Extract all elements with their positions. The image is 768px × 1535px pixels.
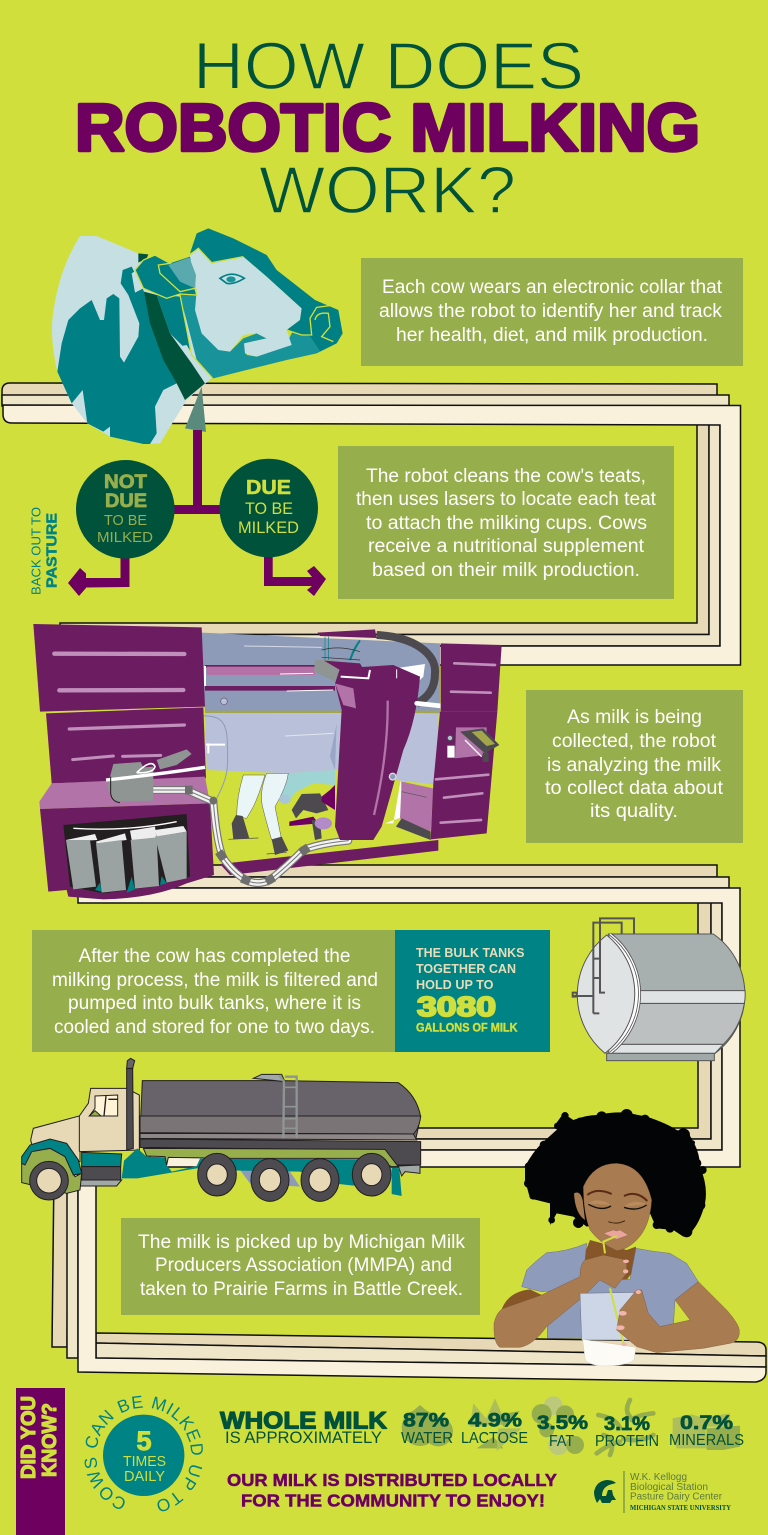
text box: milk quality analysis: collected, the robot [552, 731, 717, 752]
text box: electronic collar [361, 258, 743, 366]
panel: did you know: KNOW? [39, 1403, 61, 1477]
stats: milk composition: 3.5% [537, 1412, 588, 1434]
text box: filtering and cooling: After the cow has completed the [78, 946, 350, 967]
neck [583, 1240, 637, 1280]
icon: mineral cubes [673, 1413, 740, 1450]
cow legs and udder [228, 770, 335, 855]
text box: filtering and cooling: pumped into bulk tanks, where it is [68, 993, 361, 1014]
hose and robot arm [314, 629, 442, 840]
arrow: back out to pasture [68, 558, 130, 596]
text box: cleaning and attaching cups: based on their milk production. [372, 560, 640, 581]
title: WORK? [259, 153, 516, 228]
callout: tank capacity 3080 gallons [395, 930, 550, 1052]
node: due to be milked: DUE [246, 477, 291, 499]
text box: pickup by MMPA: taken to Prairie Farms in Battle Creek. [140, 1279, 463, 1300]
text box: cleaning and attaching cups: to attach the milking cups. Cows [366, 513, 647, 534]
text box: milk quality analysis: As milk is being [567, 707, 702, 728]
face [574, 1163, 652, 1251]
stats: milk composition: WATER [401, 1430, 453, 1447]
shirt [522, 1243, 698, 1338]
text box: electronic collar: allows the robot to identify her and track [379, 301, 723, 322]
node: due to be milked: MILKED [238, 518, 299, 537]
illustration: dairy cow with collar [52, 228, 343, 444]
stats: milk composition: MINERALS [669, 1432, 744, 1449]
panel: did you know: DID YOU [18, 1396, 40, 1479]
callout: tank capacity 3080 gallons: GALLONS OF MILK [416, 1022, 518, 1034]
text box: filtering and cooling: milking process, the milk is filtered and [52, 970, 378, 991]
message: distributed locally [227, 1470, 557, 1510]
robot floor rail [220, 840, 438, 875]
message: distributed locally: OUR MILK IS DISTRIBUTED LOCALLY [227, 1470, 557, 1490]
stats: milk composition: 87% [403, 1410, 449, 1432]
text box: filtering and cooling [32, 930, 395, 1052]
label: back out to pasture: PASTURE [44, 513, 60, 588]
illustration: girl drinking milk [494, 1109, 739, 1366]
credit: W.K. Kellogg Biological Station: Pasture Dairy Center [630, 1492, 723, 1502]
text box: cleaning and attaching cups: receive a nutritional supplement [368, 536, 645, 557]
text box: pickup by MMPA: The milk is picked up by Michigan Milk [138, 1232, 465, 1253]
text box: cleaning and attaching cups [338, 446, 674, 599]
conveyor track: winding milk path [2, 383, 766, 1382]
text box: milk quality analysis [526, 690, 743, 843]
callout: tank capacity 3080 gallons: 3080 [417, 991, 496, 1022]
icon: lactose triangles [470, 1398, 522, 1451]
collar tag [185, 387, 206, 432]
flow connector: purple gate [172, 430, 222, 514]
milk tubing [153, 790, 348, 883]
arrow: to milking [264, 557, 326, 596]
text box: pickup by MMPA: Producers Association (MMPA) and [155, 1255, 452, 1276]
stats: milk composition: 0.7% [680, 1412, 733, 1434]
icon: cow eye [220, 274, 244, 284]
badge: cows milked up to 5 times daily: DAILY [124, 1468, 165, 1485]
credit: W.K. Kellogg Biological Station [624, 1471, 731, 1513]
tank ladder pipes [573, 918, 634, 1013]
stats: milk composition: 3.1% [604, 1413, 650, 1435]
stats: milk composition: LACTOSE [461, 1430, 528, 1447]
hair [524, 1109, 707, 1237]
label: back out to pasture: BACK OUT TO [28, 507, 44, 595]
icon: protein chains [597, 1400, 653, 1455]
text box: milk quality analysis: its quality. [590, 801, 678, 822]
node: due to be milked [219, 459, 318, 557]
credit: W.K. Kellogg Biological Station: MICHIGAN STATE UNIVERSITY [630, 1504, 731, 1512]
illustration: bulk storage tank [573, 918, 745, 1061]
node: not due to be milked: DUE [105, 491, 147, 512]
label: back out to pasture [28, 507, 60, 595]
heading: whole milk is approximately [220, 1408, 388, 1447]
stats: milk composition: PROTEIN [595, 1433, 659, 1450]
credit: W.K. Kellogg Biological Station: W.K. Kellogg [630, 1472, 687, 1483]
text box: cleaning and attaching cups: then uses lasers to locate each teat [356, 489, 657, 510]
text box: milk quality analysis: to collect data about [545, 778, 724, 799]
callout: tank capacity 3080 gallons: HOLD UP TO [416, 977, 494, 992]
message: distributed locally: FOR THE COMMUNITY TO ENJOY! [241, 1490, 545, 1510]
resting arm [617, 1282, 739, 1353]
shadow sleeve [502, 1289, 542, 1309]
heading: whole milk is approximately: WHOLE MILK [220, 1408, 388, 1434]
left cabinet [33, 624, 214, 899]
icon: water droplets [402, 1405, 453, 1446]
badge: cows milked up to 5 times daily: COWS CAN BE MILKED UP TO [84, 1396, 203, 1512]
drinking arm [494, 1255, 627, 1347]
heading: whole milk is approximately: IS APPROXIMATELY [225, 1428, 382, 1447]
credit: W.K. Kellogg Biological Station: Biological Station [630, 1482, 708, 1493]
icon: fat globules [532, 1396, 584, 1455]
title [75, 29, 700, 228]
stats: milk composition [401, 1410, 744, 1450]
glass of milk [580, 1292, 638, 1366]
title: HOW DOES [193, 29, 584, 104]
node: not due to be milked [76, 460, 175, 559]
truck wheels [30, 1153, 391, 1201]
panel: did you know [16, 1388, 65, 1535]
illustration: milk tanker truck [22, 1058, 421, 1201]
text box: pickup by MMPA [121, 1218, 480, 1315]
drinking straw [603, 1236, 623, 1343]
stats: milk composition: FAT [549, 1433, 574, 1450]
fingernails [616, 1260, 641, 1346]
stats: milk composition: 4.9% [468, 1410, 522, 1432]
milk bins [63, 814, 190, 893]
node: due to be milked: TO BE [245, 499, 293, 518]
tanker ladder [279, 1075, 297, 1138]
badge: cows milked up to 5 times daily: 5 [136, 1426, 152, 1456]
vacuum unit [106, 749, 205, 803]
right cabinet [396, 643, 502, 840]
callout: tank capacity 3080 gallons: TOGETHER CAN [416, 961, 516, 976]
node: not due to be milked: NOT [104, 472, 147, 493]
node: not due to be milked: TO BE [104, 512, 147, 529]
text box: electronic collar: her health, diet, and milk production. [396, 325, 708, 346]
text box: cleaning and attaching cups: The robot cleans the cow's teats, [366, 466, 646, 487]
badge: cows milked up to 5 times daily: TIMES [123, 1453, 166, 1470]
illustration: milking robot [33, 624, 502, 899]
text box: milk quality analysis: is analyzing the milk [547, 755, 721, 776]
callout: tank capacity 3080 gallons: THE BULK TANKS [416, 945, 525, 960]
node: not due to be milked: MILKED [97, 529, 153, 546]
logo: Michigan State Spartan helmet [594, 1480, 616, 1503]
milk sensor [447, 727, 499, 762]
title: ROBOTIC MILKING [75, 90, 700, 166]
text box: electronic collar: Each cow wears an electronic collar that [382, 277, 723, 298]
text box: filtering and cooling: cooled and stored for one to two days. [54, 1017, 375, 1038]
